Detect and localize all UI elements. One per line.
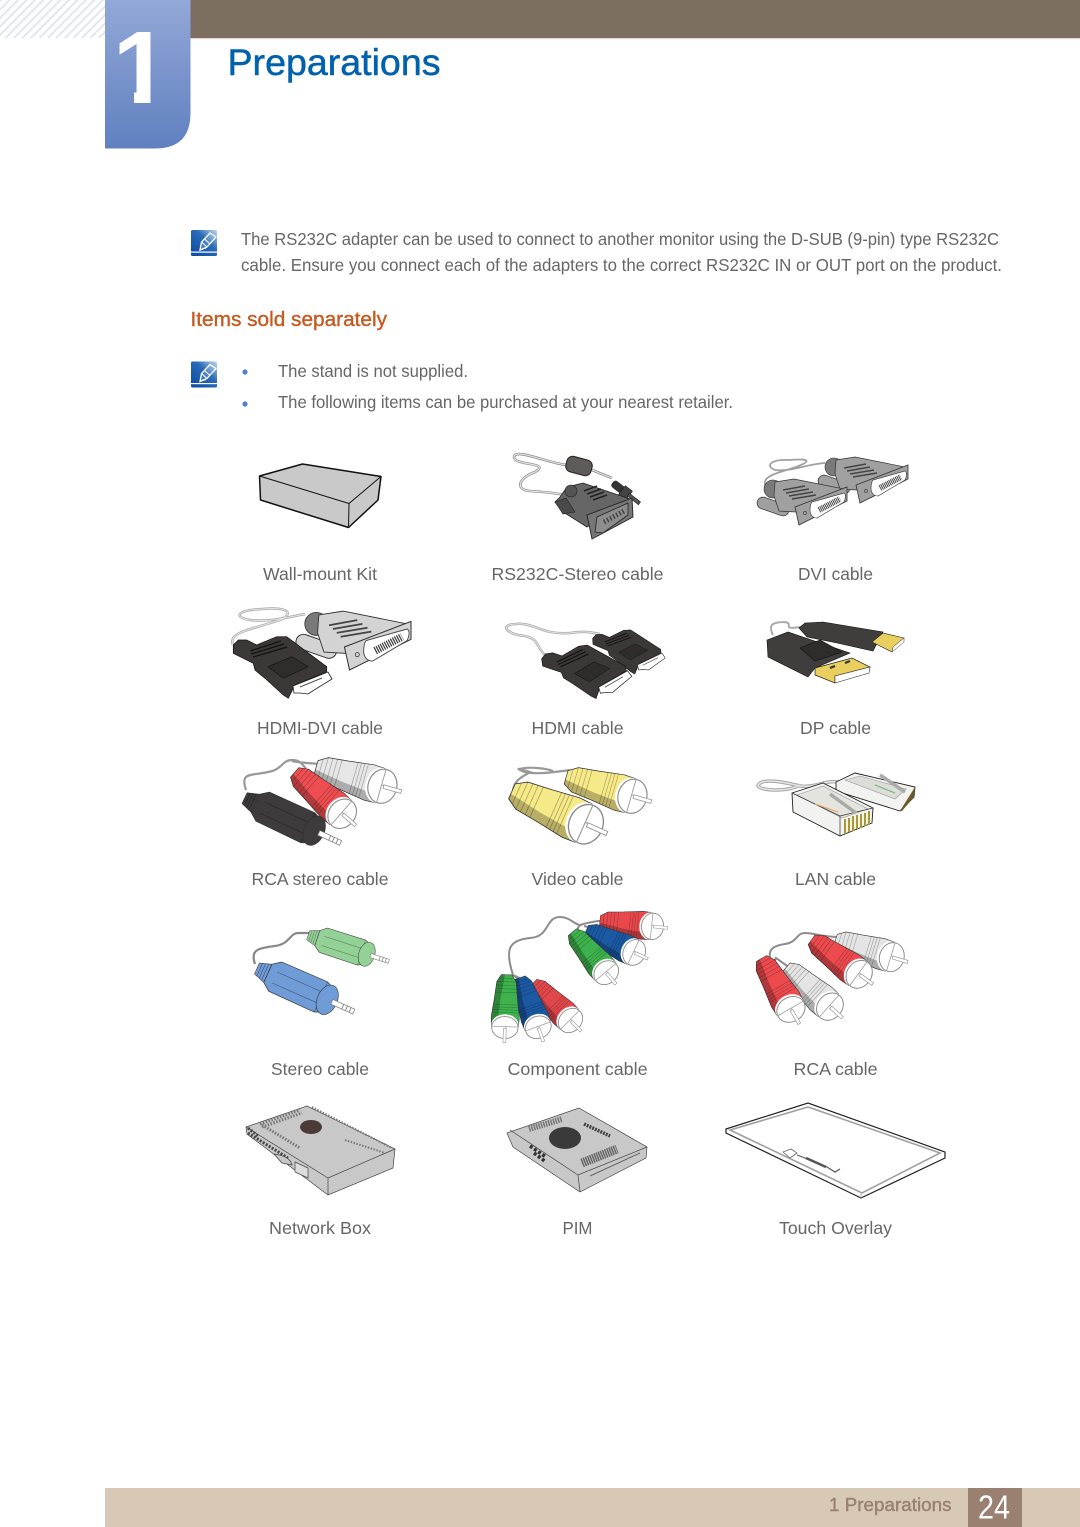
- footer: section name: 1 Preparations: [829, 1495, 952, 1515]
- item: RS232C-Stereo cable: [492, 454, 664, 584]
- footer band: [105, 1488, 1080, 1527]
- icon: red and white RCA plug pairs: [748, 925, 912, 1032]
- bullet list: The following items can be purchased at your nearest retailer.: [278, 392, 733, 412]
- icon: two DVI plugs: [763, 457, 908, 525]
- label: Component cable: [508, 1059, 648, 1079]
- item: Wall-mount Kit: [260, 464, 381, 584]
- label: Network Box: [269, 1218, 371, 1238]
- item: LAN cable: [758, 773, 915, 889]
- footer: page number box: 24: [978, 1488, 1010, 1526]
- icon: touch overlay panel: [726, 1103, 945, 1198]
- icon: six colored RCA plugs: [490, 907, 669, 1046]
- icon: network box: [246, 1106, 395, 1195]
- icon: RCA and stereo plugs: [238, 750, 406, 858]
- item: Video cable: [503, 760, 656, 889]
- label: Stereo cable: [271, 1059, 369, 1079]
- item: DP cable: [767, 622, 904, 738]
- chapter number: 1: [112, 10, 170, 125]
- label: HDMI-DVI cable: [257, 718, 383, 738]
- header: hatched corner: [0, 0, 105, 38]
- icon: two RJ45 plugs: [758, 773, 915, 836]
- item: Component cable: [490, 907, 669, 1079]
- label: Touch Overlay: [779, 1218, 892, 1238]
- label: Wall-mount Kit: [263, 564, 377, 584]
- text block: RS232C note: [241, 229, 1002, 275]
- icon: two HDMI plugs: [506, 624, 666, 705]
- label: HDMI cable: [532, 718, 624, 738]
- item: DVI cable: [763, 457, 908, 584]
- label: PIM: [562, 1218, 592, 1238]
- item: Touch Overlay: [726, 1103, 945, 1238]
- label: Video cable: [532, 869, 624, 889]
- label: RS232C-Stereo cable: [492, 564, 664, 584]
- text block: RS232C note: cable. Ensure you connect each of the adapters to the correct RS232C IN or OUT port on the product.: [241, 255, 1002, 275]
- bullet list: [242, 361, 733, 412]
- label: DVI cable: [798, 564, 873, 584]
- item: RCA cable: [748, 925, 912, 1079]
- label: RCA stereo cable: [252, 869, 388, 889]
- icon: two yellow RCA plugs: [503, 760, 656, 853]
- item: RCA stereo cable: [238, 750, 406, 889]
- bullet list: The stand is not supplied.: [278, 361, 468, 381]
- icon: PIM module: [507, 1108, 647, 1192]
- heading: items sold separately: Items sold separately: [190, 309, 387, 331]
- item: HDMI-DVI cable: [232, 609, 411, 738]
- title: Preparations: [228, 41, 440, 83]
- text block: RS232C note: The RS232C adapter can be used to connect to another monitor using the D-SUB (9-pin) type RS232C: [241, 229, 999, 249]
- icon: box: [260, 464, 381, 528]
- item: Stereo cable: [250, 923, 393, 1079]
- icon: two DisplayPort plugs: [767, 622, 904, 683]
- label: DP cable: [800, 718, 871, 738]
- icon: HDMI and DVI plugs: [232, 609, 411, 698]
- label: LAN cable: [795, 869, 876, 889]
- icon: serial connector with stereo plug: [514, 454, 643, 539]
- item: PIM: [507, 1108, 647, 1238]
- item: HDMI cable: [506, 624, 666, 738]
- icon: blue and green stereo plugs: [250, 923, 393, 1027]
- label: RCA cable: [794, 1059, 878, 1079]
- chapter tab: [105, 0, 190, 148]
- icon: note: [191, 362, 217, 388]
- footer: page number box: [968, 1488, 1022, 1527]
- header: brown bar: [190, 0, 1080, 39]
- item: Network Box: [246, 1106, 395, 1238]
- icon: note: [191, 230, 217, 256]
